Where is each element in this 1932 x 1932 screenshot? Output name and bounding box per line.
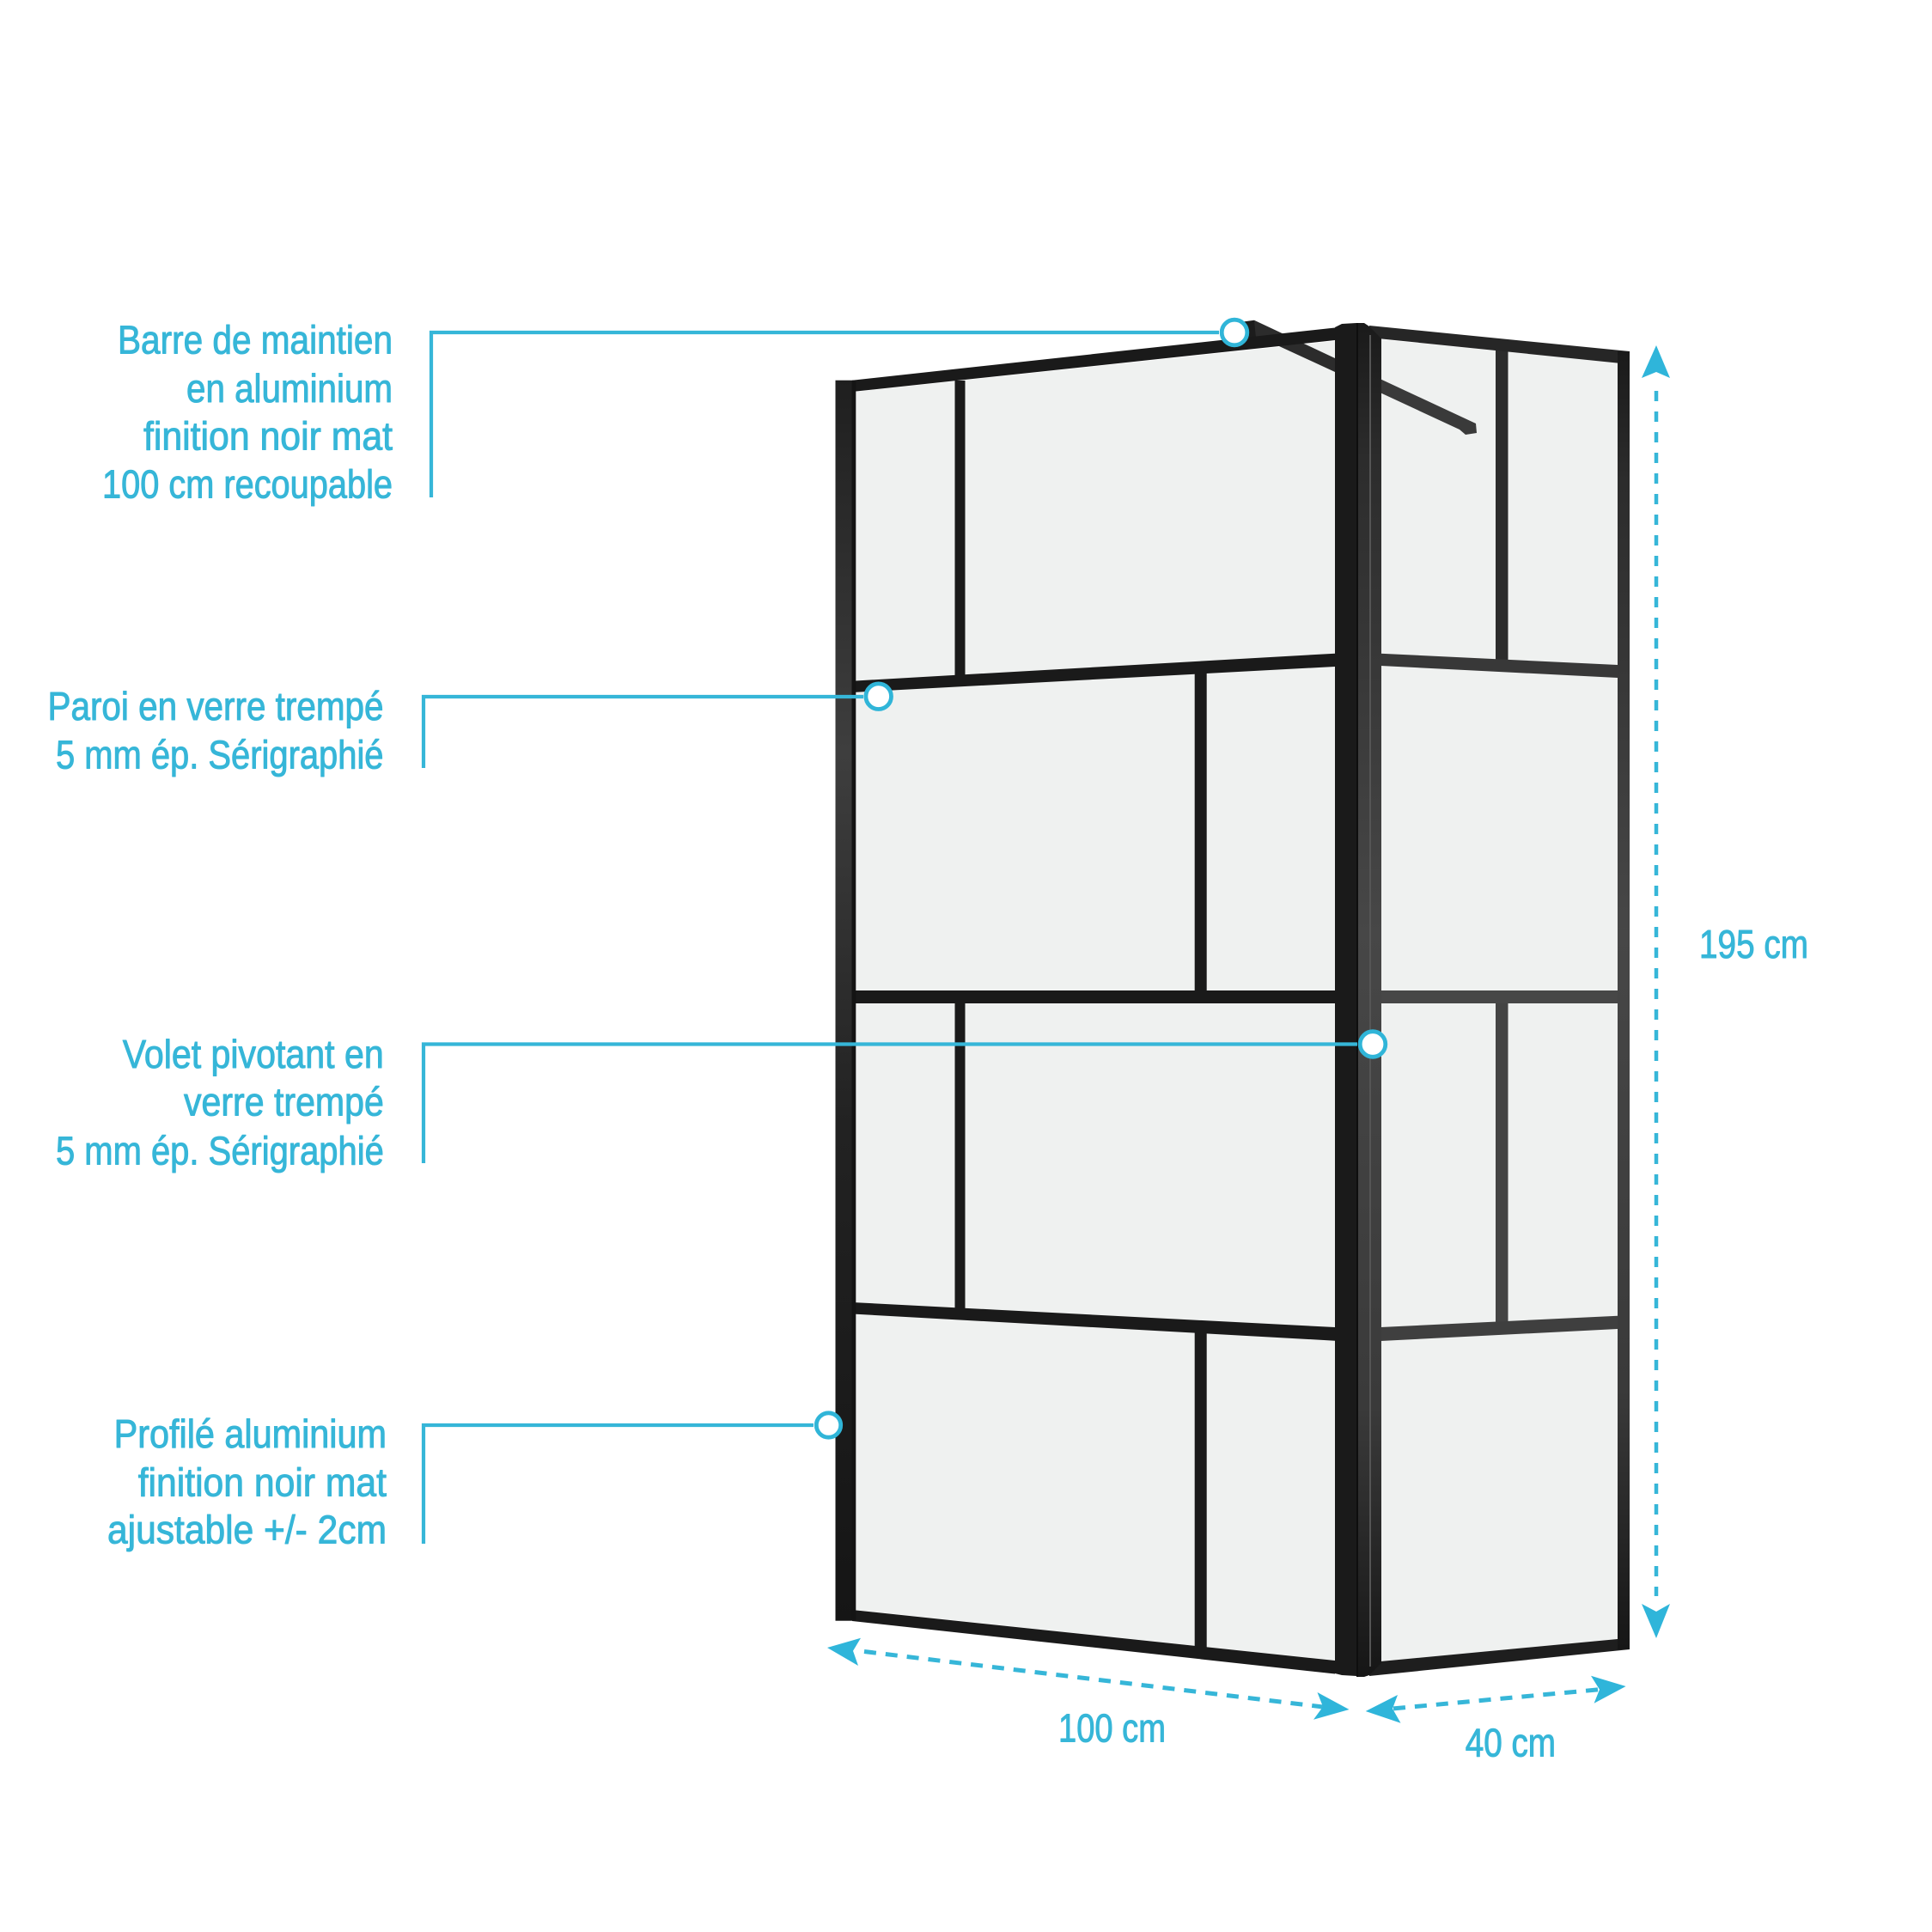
dimension: depth 40 cm [1366, 1676, 1626, 1764]
support bar, right section [1374, 376, 1477, 435]
callout: barre de maintien: en aluminium [186, 366, 393, 411]
dimension: width 100 cm [827, 1638, 1349, 1751]
callout: paroi en verre [48, 684, 892, 777]
panel: left fixed glass wall [835, 320, 1335, 1674]
right panel horizontal rails [1369, 326, 1630, 364]
callout: volet pivotant [56, 1032, 1386, 1173]
bar wall mount [1234, 320, 1257, 350]
dimension: height 195 cm [1642, 345, 1808, 1638]
left aluminium profile [835, 381, 852, 1621]
right panel mullions [1496, 350, 1508, 1326]
dimension: width 100 cm: 100 cm [1058, 1706, 1166, 1751]
left wall mullions [955, 381, 1207, 1654]
dimension: height 195 cm: 195 cm [1699, 922, 1808, 966]
callout: profilé aluminium [107, 1411, 841, 1551]
callout: volet pivotant: Volet pivotant en [123, 1032, 384, 1076]
callout: volet pivotant: 5 mm ép. Sérigraphié [56, 1129, 384, 1173]
left wall horizontal rails [852, 328, 1335, 1673]
callout: profilé aluminium: Profilé aluminium [114, 1411, 387, 1456]
callout: paroi en verre: 5 mm ép. Sérigraphié [56, 732, 383, 777]
callout: barre de maintien: finition noir mat [143, 414, 393, 459]
dimension: depth 40 cm: 40 cm [1466, 1720, 1556, 1764]
callout: profilé aluminium: ajustable +/- 2cm [107, 1507, 387, 1551]
callout: paroi en verre: Paroi en verre trempé [48, 684, 383, 728]
left glass pane [856, 341, 1335, 1661]
panel: pivoting glass return [1369, 326, 1630, 1676]
callout: profilé aluminium: finition noir mat [138, 1460, 387, 1505]
callout: barre de maintien [102, 318, 1247, 507]
callout: barre de maintien: 100 cm recoupable [102, 462, 393, 507]
callout: volet pivotant: verre trempé [184, 1079, 384, 1124]
support bar, left section [1254, 320, 1335, 372]
callout: barre de maintien: Barre de maintien [118, 318, 393, 363]
right frame post [1618, 351, 1630, 1649]
right glass pane [1380, 339, 1618, 1661]
central pivot post [1335, 323, 1381, 1677]
